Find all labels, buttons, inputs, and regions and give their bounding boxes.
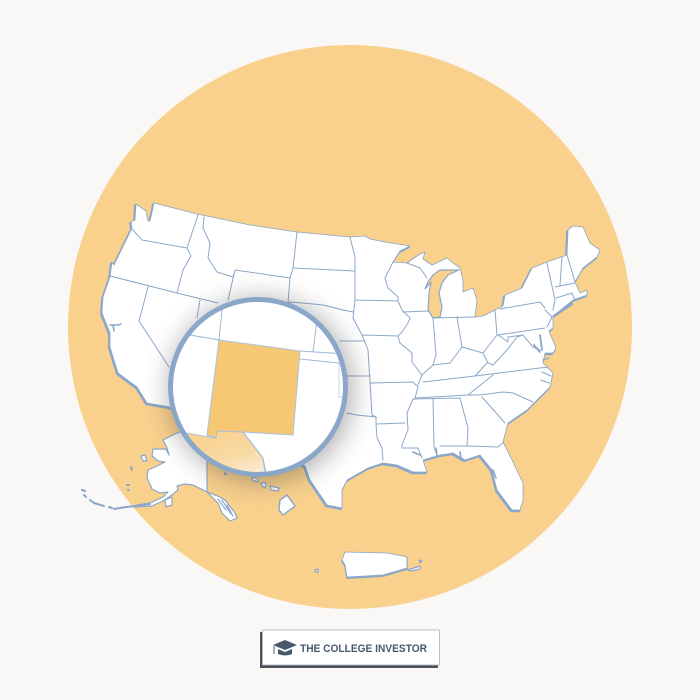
bays and long island bbox=[110, 304, 572, 478]
coast shadow outline bbox=[101, 204, 599, 511]
orange background circle bbox=[68, 45, 632, 609]
map: contiguous United States bbox=[101, 203, 600, 511]
logo shadow bbox=[260, 632, 438, 668]
magnifier shadow bbox=[169, 298, 353, 482]
logo box bbox=[262, 630, 440, 665]
icon: graduation cap bbox=[273, 640, 297, 656]
lens state borders bbox=[190, 310, 342, 472]
state borders bbox=[110, 215, 575, 460]
logo bbox=[260, 630, 440, 668]
map: Alaska bbox=[82, 430, 237, 521]
logo text: THE COLLEGE INVESTOR bbox=[300, 643, 427, 655]
lens ring bbox=[170, 300, 346, 474]
map: Puerto Rico bbox=[315, 552, 422, 578]
alaska islands bbox=[82, 467, 150, 509]
land fill bbox=[102, 203, 600, 510]
Mexico area bbox=[186, 432, 265, 472]
magnifier lens bbox=[170, 299, 346, 490]
map: Hawaii bbox=[224, 472, 295, 515]
New Mexico highlighted state bbox=[207, 340, 300, 438]
Lake Michigan bbox=[425, 270, 459, 318]
